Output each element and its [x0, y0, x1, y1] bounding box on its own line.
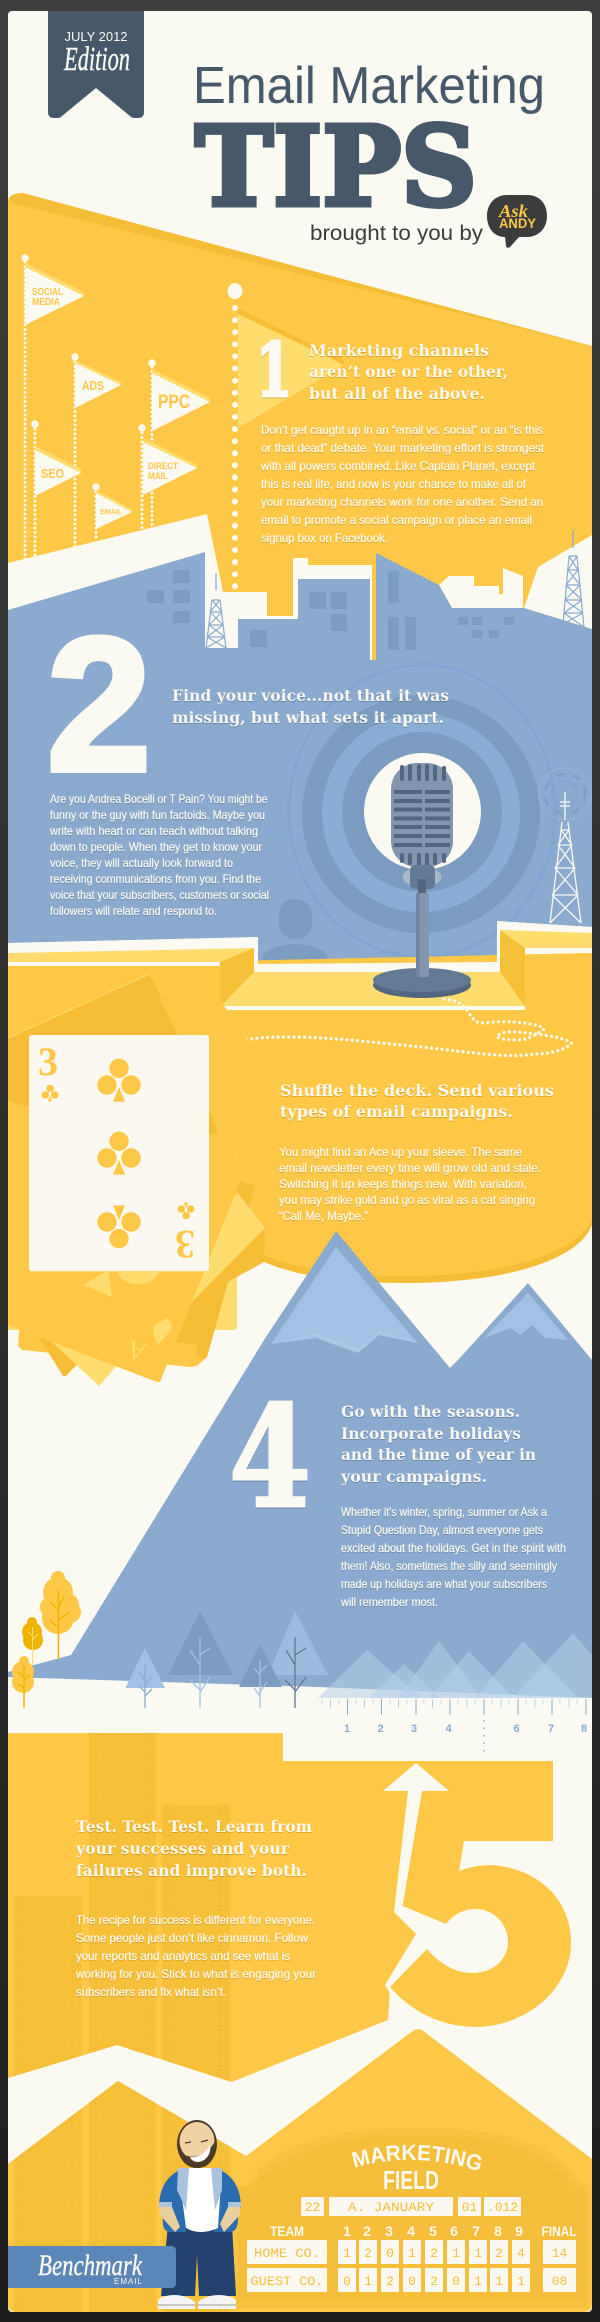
subtitle: brought to you by: brought to you by — [310, 222, 484, 245]
flag: Direct Mail: DIRECT — [148, 461, 178, 471]
scoreboard: 2 — [364, 2246, 372, 2261]
playing card: 3 of clubs: 3 — [38, 1039, 58, 1084]
scoreboard: 08 — [552, 2274, 567, 2289]
scoreboard: 22 — [305, 2200, 320, 2215]
translucent hills — [318, 1633, 592, 1698]
icon: Ask Andy speech bubble: ANDY — [499, 215, 537, 231]
flag: PPC: PPC — [158, 392, 190, 413]
blue skyline and section 2 background — [8, 552, 592, 964]
text block: tip 1 — [260, 423, 545, 545]
heading: tip 4: Go with the seasons. — [341, 1402, 520, 1421]
flag: Ads: ADS — [82, 378, 104, 393]
text block: tip 4: will remember most. — [340, 1595, 438, 1609]
icon: radio tower right — [563, 530, 584, 627]
ruler: 7 — [548, 1723, 554, 1735]
text block: tip 2: funny or the guy with fun factoids. Maybe you — [50, 808, 265, 822]
flag: Email: EMAIL — [100, 507, 122, 516]
flag: SEO: SEO — [41, 466, 64, 481]
heading: tip 1: aren’t one or the other, — [309, 362, 508, 381]
text block: tip 3: You might find an Ace up your sleeve. The same — [279, 1145, 522, 1159]
flag: Social Media — [21, 254, 84, 560]
scoreboard: 14 — [552, 2246, 567, 2261]
text block: tip 2: followers will relate and respond to. — [50, 904, 217, 918]
text block: tip 5 — [75, 1913, 316, 1999]
scoreboard: 1 — [474, 2274, 482, 2289]
ribbon: July 2012 edition — [48, 11, 144, 118]
text block: tip 3 — [279, 1145, 541, 1223]
text block: tip 4 — [340, 1505, 566, 1609]
heading: tip 3: types of email campaigns. — [280, 1102, 513, 1121]
flag: Direct Mail — [138, 424, 197, 530]
scoreboard: 3 — [385, 2223, 393, 2239]
panel: section 3 yellow stage background — [8, 953, 592, 1283]
icon: microphone — [391, 763, 453, 889]
number 2: 2 — [47, 599, 151, 811]
scoreboard: 2 — [430, 2274, 438, 2289]
scoreboard: 4 — [407, 2223, 415, 2239]
playing card: 3 of clubs: 3 — [175, 1222, 195, 1267]
heading: tip 5 — [75, 1817, 312, 1880]
number 4: 4 — [229, 1376, 311, 1540]
scoreboard — [238, 2135, 585, 2302]
flag: Direct Mail: MAIL — [148, 471, 168, 481]
autumn trees — [12, 1571, 81, 1708]
ruler — [322, 1699, 587, 1755]
heading: tip 1: but all of the above. — [309, 384, 485, 403]
scoreboard: 2 — [386, 2274, 394, 2289]
flag: Email — [92, 483, 132, 540]
scoreboard: 7 — [472, 2223, 480, 2239]
text block: tip 5: The recipe for success is different for everyone. — [76, 1913, 315, 1927]
scoreboard: 2 — [495, 2246, 503, 2261]
scoreboard: MARKETING — [352, 2144, 482, 2170]
text block: tip 1: signup box on Facebook. — [261, 531, 388, 545]
heading: tip 4 — [340, 1402, 536, 1486]
text block: tip 2: Are you Andrea Bocelli or T Pain? You might be — [50, 792, 268, 806]
text block: tip 4: excited about the holidays. Get in the spirit with — [341, 1541, 566, 1555]
icon: up arrow forming the 5 — [383, 1763, 508, 2030]
badge: Benchmark Email logo: EMAIL — [114, 2277, 143, 2286]
text block: tip 1: this is real life, and now is your chance to make all of — [261, 477, 527, 491]
icon: person silhouette — [263, 899, 328, 964]
scoreboard: 0 — [343, 2274, 351, 2289]
text block: tip 2: write with heart or can teach without talking — [49, 824, 258, 838]
playing card: 3 of clubs — [29, 1035, 209, 1272]
text block: tip 1: with all powers combined. Like Captain Planet, except — [260, 459, 536, 473]
text block: tip 1: or that dead” debate. Your marketing effort is strongest — [261, 441, 545, 455]
flag: SEO — [31, 420, 81, 560]
scoreboard: FINAL — [542, 2223, 577, 2239]
scoreboard: 2 — [363, 2223, 371, 2239]
sound rings — [289, 665, 555, 957]
text block: tip 2: voice that your subscribers, customers or social — [50, 888, 269, 902]
cream back skyline — [8, 514, 592, 662]
scoreboard: 1 — [452, 2246, 460, 2261]
text block: tip 5: working for you. Stick to what is engaging your — [75, 1967, 316, 1981]
ruler: 2 — [377, 1723, 384, 1735]
scoreboard: FIELD — [383, 2165, 439, 2195]
scoreboard: 01 — [462, 2200, 477, 2215]
ribbon: July 2012 edition: JULY 2012 — [64, 29, 128, 44]
heading: tip 3 — [280, 1081, 554, 1121]
text block: tip 1: your marketing channels work for one another. Send an — [261, 495, 543, 509]
scoreboard: 5 — [429, 2223, 437, 2239]
scoreboard: HOME CO. — [254, 2246, 320, 2261]
text block: tip 2 — [49, 792, 269, 918]
text block: tip 3: “Call Me, Maybe.” — [279, 1209, 368, 1223]
icon: Ask Andy speech bubble: Ask — [498, 201, 528, 221]
microphone stand — [373, 879, 471, 998]
heading: tip 2: missing, but what sets it apart. — [172, 708, 444, 727]
mascot: Andy — [158, 2120, 241, 2309]
text block: tip 2: receiving communications from you. Find the — [50, 872, 261, 886]
scoreboard: 0 — [452, 2274, 460, 2289]
text block: tip 3: email newsletter every time will grow old and stale. — [279, 1161, 541, 1175]
icon: broadcast tower with signal — [539, 768, 591, 923]
building windows — [147, 570, 514, 650]
big flag pole with number flag — [228, 283, 344, 590]
scoreboard: TEAM — [270, 2223, 304, 2239]
scoreboard: 0 — [386, 2246, 394, 2261]
flag: Social Media: MEDIA — [32, 297, 60, 308]
scoreboard: 2 — [430, 2246, 438, 2261]
background chart bars — [14, 1733, 230, 2322]
scoreboard: 9 — [515, 2223, 523, 2239]
scoreboard: 1 — [408, 2246, 416, 2261]
text block: tip 2: voice, they will actually look forward to — [50, 856, 233, 870]
flag: Social Media: SOCIAL — [32, 287, 63, 298]
text block: tip 2: down to people. When they get to know your — [50, 840, 262, 854]
text block: tip 4: them! Also, sometimes the silly and seemingly — [341, 1559, 557, 1573]
dotted microphone cord — [209, 999, 571, 1060]
ruler: 8 — [581, 1723, 587, 1735]
scoreboard: 1 — [474, 2246, 482, 2261]
scoreboard: 1 — [343, 2223, 351, 2239]
heading: tip 4: your campaigns. — [340, 1467, 487, 1486]
title: TIPS: TIPS — [195, 102, 477, 231]
heading: tip 5: Test. Test. Test. Learn from — [76, 1817, 312, 1836]
heading: tip 2: Find your voice...not that it was — [172, 686, 449, 705]
scoreboard: A. JANUARY — [348, 2200, 434, 2215]
scoreboard: 1 — [364, 2274, 372, 2289]
scoreboard: .012 — [487, 2200, 518, 2215]
text block: tip 1: email to promote a social campaign or place an email — [261, 513, 532, 527]
heading: tip 5: your successes and your — [75, 1839, 290, 1858]
text block: tip 3: Switching it up keeps things new. With variation, — [279, 1177, 527, 1191]
text block: tip 1: Don’t get caught up in an “email vs. social” or an “is this — [261, 423, 543, 437]
stage: floor and side walls — [220, 930, 592, 1010]
panel: bottom yellow field — [8, 2027, 592, 2312]
ruler: 1 — [344, 1723, 350, 1735]
heading: tip 1 — [309, 341, 508, 403]
text block: tip 4: Stupid Question Day, almost everyone gets — [341, 1523, 543, 1537]
heading: tip 2 — [172, 686, 449, 727]
stage: cream band under blue wall — [8, 921, 592, 972]
mountains — [8, 1231, 592, 1698]
scoreboard: GUEST CO. — [250, 2274, 324, 2289]
scoreboard: 8 — [494, 2223, 502, 2239]
text block: tip 4: made up holidays are what your subscribers — [341, 1577, 547, 1591]
stage: left ledge — [8, 948, 258, 966]
scattered playing cards — [8, 975, 265, 1386]
ruler: 4 — [445, 1723, 452, 1735]
badge: Benchmark Email logo — [8, 2246, 176, 2288]
heading: tip 3: Shuffle the deck. Send various — [280, 1081, 554, 1100]
panel: section 1 yellow background — [8, 193, 592, 660]
badge: Benchmark Email logo: Benchmark — [38, 2249, 143, 2282]
flag: PPC — [148, 359, 210, 530]
text block: tip 5: subscribers and fix what isn’t. — [76, 1985, 226, 1999]
ribbon: July 2012 edition: Edition — [63, 41, 130, 78]
scoreboard: 1 — [517, 2274, 525, 2289]
scoreboard: 0 — [408, 2274, 416, 2289]
text block: tip 3: you may strike gold and go as viral as a cat singing — [279, 1193, 535, 1207]
text block: tip 4: Whether it’s winter, spring, summer or Ask a — [341, 1505, 547, 1519]
icon: radio tower left — [206, 573, 226, 648]
ruler: 6 — [514, 1723, 520, 1735]
text block: tip 5: your reports and analytics and see what is — [76, 1949, 290, 1963]
scoreboard: 6 — [450, 2223, 458, 2239]
number 1: 1 — [256, 328, 292, 414]
heading: tip 1: Marketing channels — [309, 341, 489, 360]
heading: tip 4: and the time of year in — [341, 1445, 536, 1464]
blue winter trees — [126, 1611, 328, 1708]
scattered playing cards: A — [123, 1334, 150, 1367]
ruler: 3 — [411, 1723, 417, 1735]
heading: tip 4: Incorporate holidays — [341, 1424, 521, 1443]
scoreboard: 4 — [517, 2246, 525, 2261]
heading: tip 5: failures and improve both. — [76, 1861, 307, 1880]
flag: Ads — [71, 353, 121, 552]
text block: tip 5: Some people just don’t like cinnamon. Follow — [76, 1931, 308, 1945]
scoreboard: 1 — [343, 2246, 351, 2261]
icon: Ask Andy speech bubble — [487, 195, 547, 248]
title: Email Marketing: Email Marketing — [193, 57, 545, 115]
scoreboard: 1 — [495, 2274, 503, 2289]
panel: section 5 yellow with number 5 — [8, 1733, 571, 2082]
